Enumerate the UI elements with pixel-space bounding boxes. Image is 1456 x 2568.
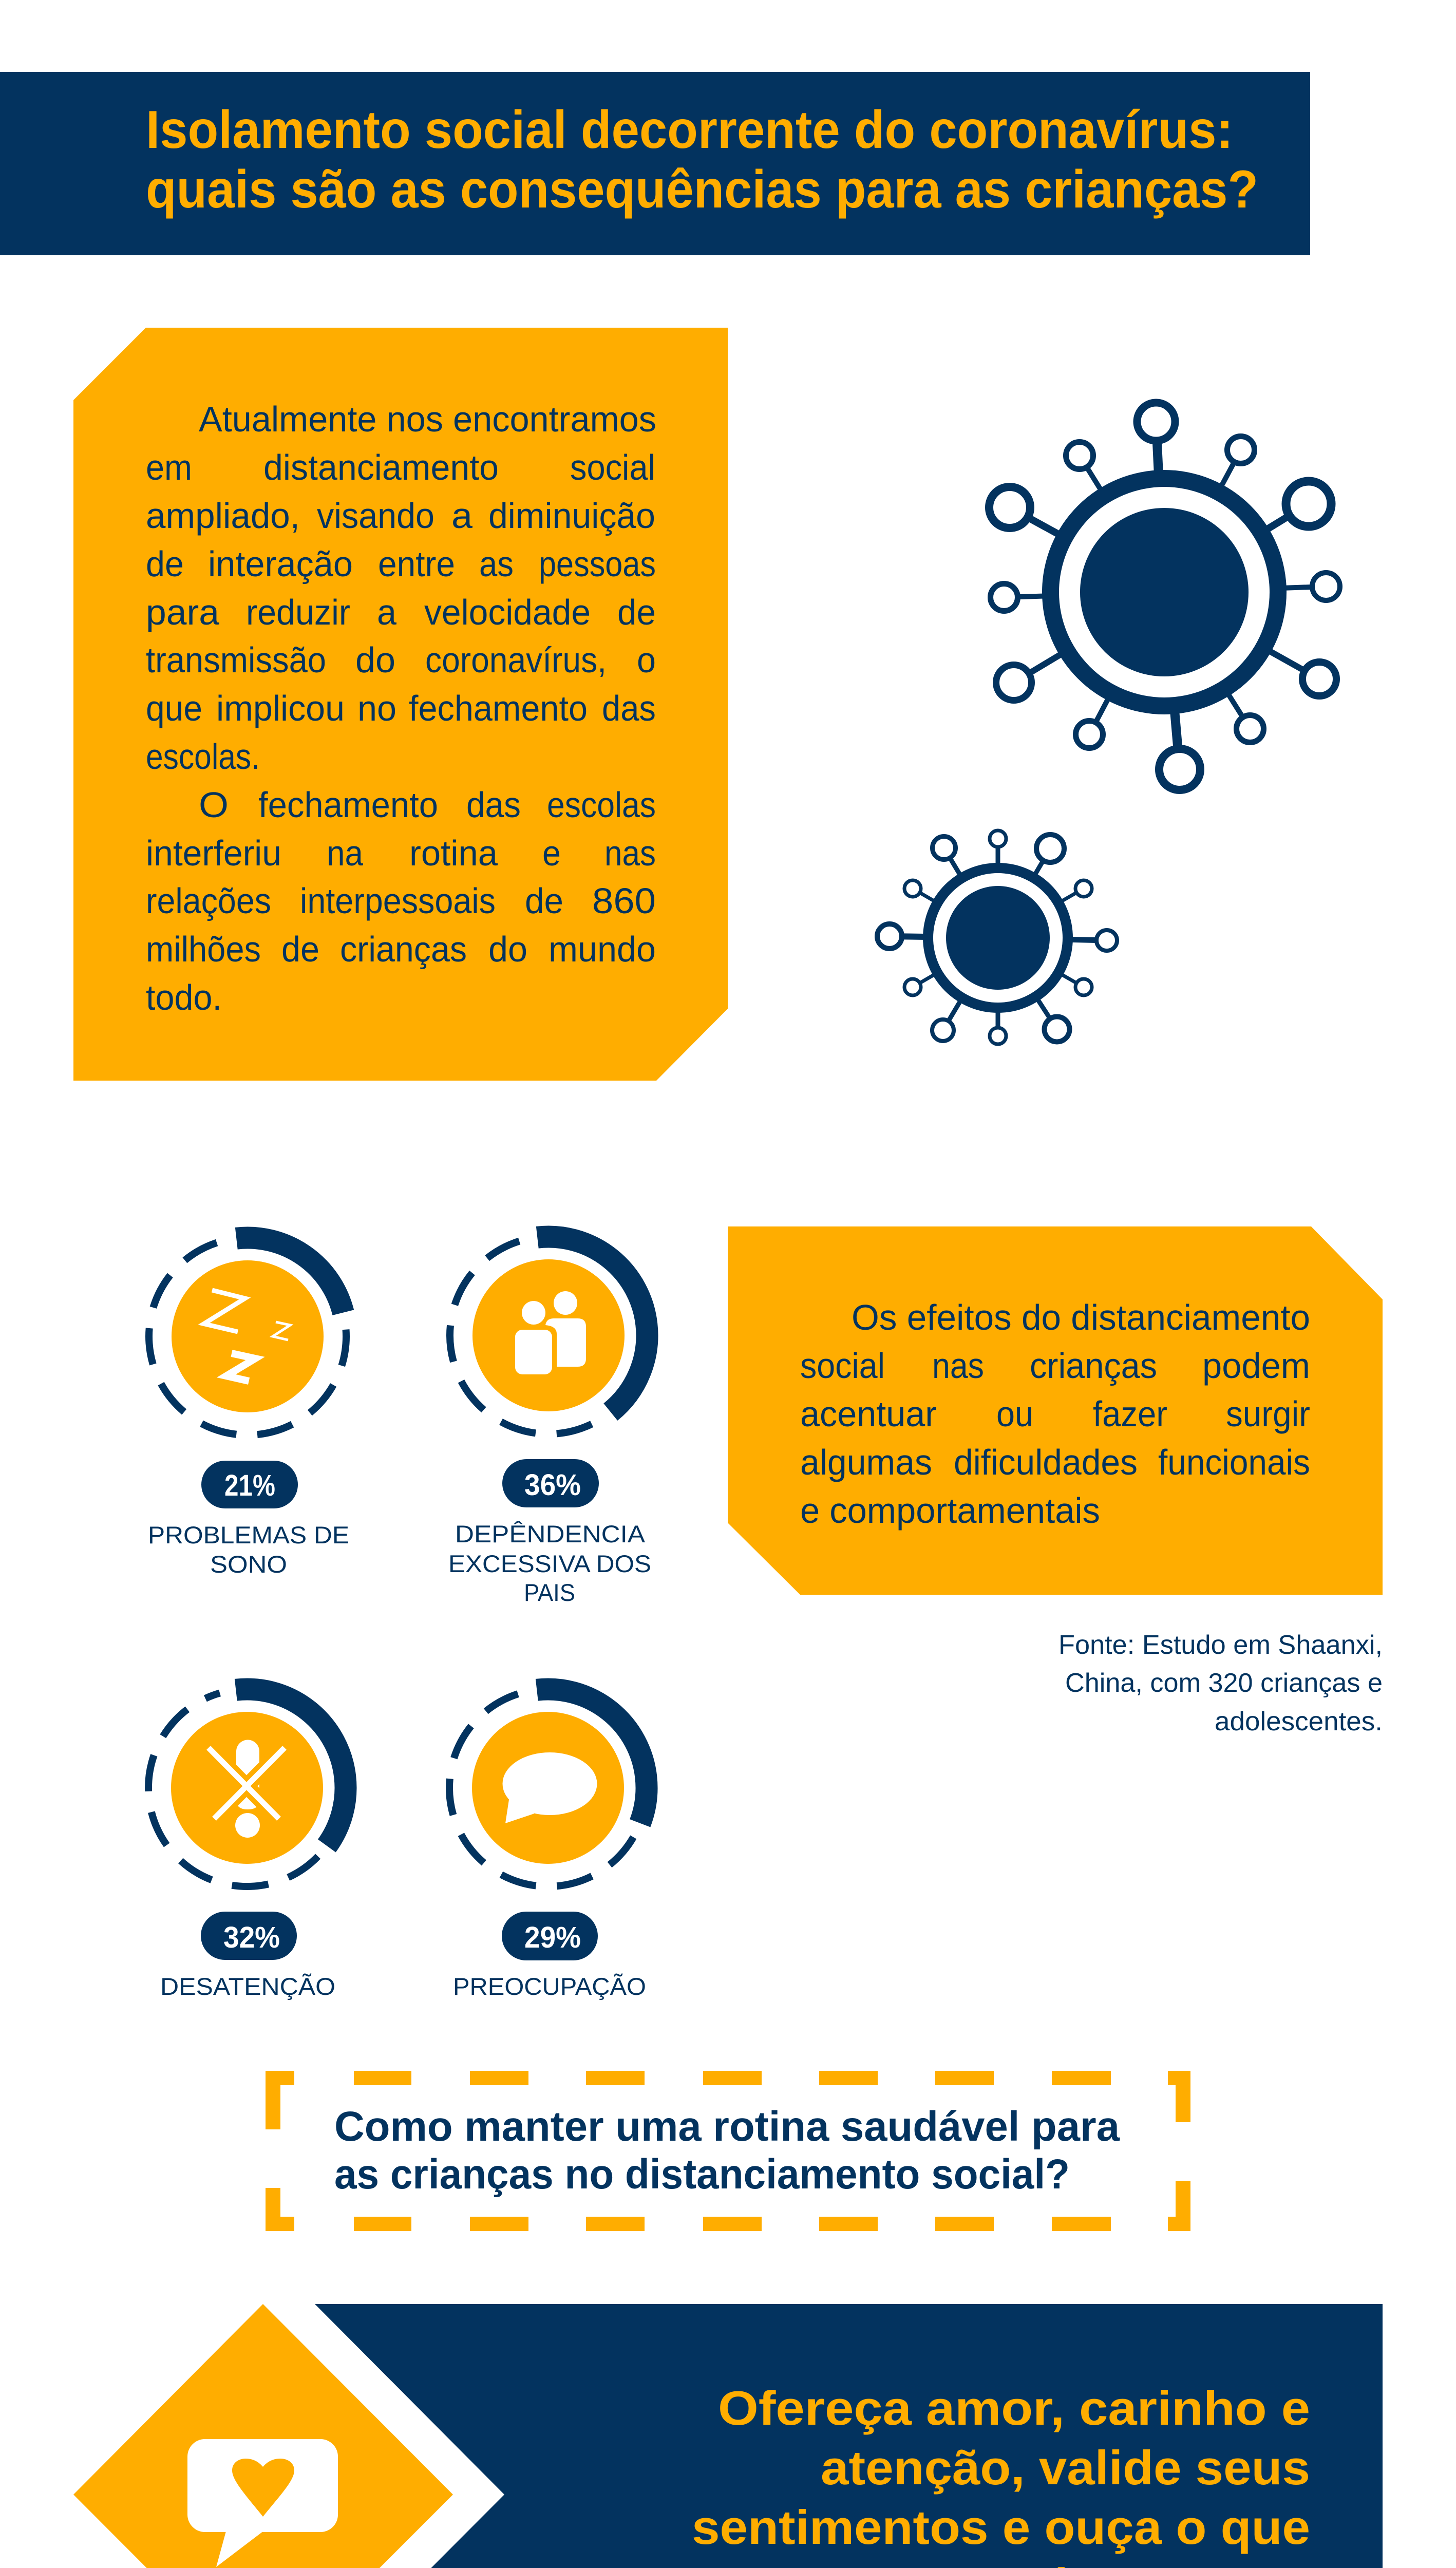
source note: adolescentes. bbox=[1215, 1707, 1383, 1736]
panel: effects of distancing bbox=[728, 1226, 1383, 1595]
introduction text: a bbox=[451, 496, 472, 536]
label: EXCESSIVA DOS bbox=[448, 1550, 651, 1577]
introduction text: social bbox=[570, 447, 655, 487]
label bbox=[448, 1520, 651, 1606]
introduction text: das bbox=[602, 688, 656, 728]
effects text: crianças bbox=[1030, 1346, 1157, 1386]
introduction text: mundo bbox=[549, 929, 656, 969]
introduction text: a bbox=[377, 592, 396, 632]
percentage pill: 29% bbox=[524, 1921, 581, 1954]
introduction text: fechamento bbox=[409, 688, 588, 728]
percentage pill: 36% bbox=[524, 1468, 581, 1502]
effects text: ou bbox=[996, 1394, 1033, 1434]
effects text: e comportamentais bbox=[800, 1490, 1100, 1531]
icon: zzz bbox=[204, 1290, 290, 1381]
introduction text: pessoas bbox=[539, 544, 656, 584]
effects text: social bbox=[800, 1346, 885, 1386]
percentage pill bbox=[201, 1912, 297, 1960]
introduction text: do bbox=[488, 929, 527, 969]
stat: problemas de sono 21% bbox=[138, 1227, 357, 1578]
tip text bbox=[692, 2381, 1313, 2568]
effects text: Os efeitos do distanciamento bbox=[852, 1297, 1310, 1337]
introduction text: nas bbox=[604, 833, 656, 873]
introduction text bbox=[146, 399, 656, 1017]
introduction text: e bbox=[542, 833, 561, 873]
introduction text: 860 bbox=[592, 881, 656, 921]
introduction text: das bbox=[466, 785, 521, 825]
percentage pill bbox=[502, 1459, 599, 1507]
tip text: sentimentos e ouça o que bbox=[692, 2500, 1310, 2554]
gauge ring bbox=[413, 1653, 683, 1922]
introduction text: distanciamento bbox=[263, 447, 499, 487]
source note: Fonte: Estudo em Shaanxi, bbox=[1058, 1630, 1383, 1660]
effects text: nas bbox=[932, 1346, 984, 1386]
percentage pill bbox=[502, 1912, 598, 1960]
tip text: atenção, valide seus bbox=[821, 2441, 1310, 2495]
introduction text: em bbox=[146, 447, 192, 487]
introduction text: fechamento bbox=[258, 785, 438, 825]
effects text bbox=[800, 1297, 1310, 1531]
stat: desatenção 32% bbox=[108, 1649, 386, 2000]
effects text: algumas bbox=[800, 1442, 932, 1482]
label: SONO bbox=[210, 1551, 287, 1578]
question text bbox=[334, 2103, 1120, 2198]
introduction text: implicou bbox=[216, 688, 345, 728]
icon: large virus bbox=[989, 403, 1340, 790]
label: PREOCUPAÇÃO bbox=[453, 1973, 646, 2000]
introduction text: escolas bbox=[547, 785, 656, 825]
introduction text: O bbox=[199, 785, 229, 825]
introduction text: o bbox=[637, 640, 656, 680]
source note: China, com 320 crianças e bbox=[1065, 1668, 1383, 1698]
introduction text: crianças bbox=[340, 929, 467, 969]
label: DESATENÇÃO bbox=[160, 1973, 335, 2000]
tip text: Ofereça amor, carinho e bbox=[718, 2381, 1310, 2435]
effects text: podem bbox=[1202, 1346, 1310, 1386]
introduction text: do bbox=[355, 640, 395, 680]
label: PROBLEMAS DE bbox=[148, 1521, 349, 1549]
label bbox=[148, 1521, 349, 1578]
introduction text: as bbox=[479, 544, 514, 584]
introduction text: relações bbox=[146, 881, 271, 921]
introduction text: de bbox=[617, 592, 656, 632]
introduction text: para bbox=[146, 592, 219, 632]
panel: introduction bbox=[73, 328, 728, 1081]
title text: Isolamento social decorrente do coronavírus: bbox=[146, 100, 1233, 160]
introduction text: milhões bbox=[146, 929, 261, 969]
stat: dependência excessiva dos pais 36% bbox=[417, 1203, 680, 1606]
title banner bbox=[0, 72, 1310, 255]
icon: speech bubble bbox=[502, 1752, 597, 1823]
source note bbox=[1058, 1630, 1383, 1736]
percentage pill: 21% bbox=[224, 1469, 275, 1502]
introduction text: escolas. bbox=[146, 737, 260, 777]
introduction text: interpessoais bbox=[300, 881, 496, 921]
introduction text: interferiu bbox=[146, 833, 281, 873]
icon: parent and child bbox=[515, 1291, 586, 1374]
panel: tip 1 bbox=[73, 2304, 1383, 2568]
percentage pill bbox=[201, 1461, 298, 1508]
title text: quais são as consequências para as crianças? bbox=[146, 160, 1258, 219]
introduction text: de bbox=[525, 881, 563, 921]
callout: dashed question box bbox=[266, 2071, 1190, 2231]
label: DEPÊNDENCIA bbox=[455, 1520, 646, 1547]
introduction text: rotina bbox=[409, 833, 498, 873]
introduction text: reduzir bbox=[246, 592, 350, 632]
question text: as crianças no distanciamento social? bbox=[334, 2151, 1070, 2198]
question text: Como manter uma rotina saudável para bbox=[334, 2103, 1120, 2150]
introduction text: transmissão bbox=[146, 640, 326, 680]
label: PAIS bbox=[524, 1579, 575, 1606]
introduction text: velocidade bbox=[424, 592, 591, 632]
icon: crossed exclamation mark bbox=[209, 1740, 285, 1838]
introduction text: de bbox=[146, 544, 184, 584]
stat: preocupação 29% bbox=[413, 1653, 683, 2000]
icon: small virus bbox=[877, 830, 1117, 1044]
introduction text: todo. bbox=[146, 977, 222, 1017]
introduction text: visando bbox=[317, 496, 434, 536]
icon: speech bubble with heart bbox=[187, 2439, 338, 2567]
introduction text: Atualmente nos encontramos bbox=[199, 399, 656, 439]
effects text: dificuldades bbox=[954, 1442, 1138, 1482]
introduction text: interação bbox=[208, 544, 353, 584]
introduction text: entre bbox=[378, 544, 455, 584]
introduction text: de bbox=[281, 929, 319, 969]
gauge ring bbox=[417, 1203, 680, 1467]
effects text: acentuar bbox=[800, 1394, 937, 1434]
effects text: fazer bbox=[1093, 1394, 1167, 1434]
introduction text: no bbox=[357, 688, 396, 728]
introduction text: coronavírus, bbox=[425, 640, 607, 680]
introduction text: diminuição bbox=[488, 496, 655, 536]
title text bbox=[146, 100, 1258, 219]
effects text: funcionais bbox=[1158, 1442, 1310, 1482]
introduction text: ampliado, bbox=[146, 496, 300, 536]
introduction text: na bbox=[327, 833, 363, 873]
gauge ring bbox=[108, 1649, 386, 1927]
percentage pill: 32% bbox=[223, 1921, 280, 1954]
gauge ring bbox=[138, 1227, 357, 1446]
introduction text: que bbox=[146, 688, 202, 728]
effects text: surgir bbox=[1226, 1394, 1310, 1434]
